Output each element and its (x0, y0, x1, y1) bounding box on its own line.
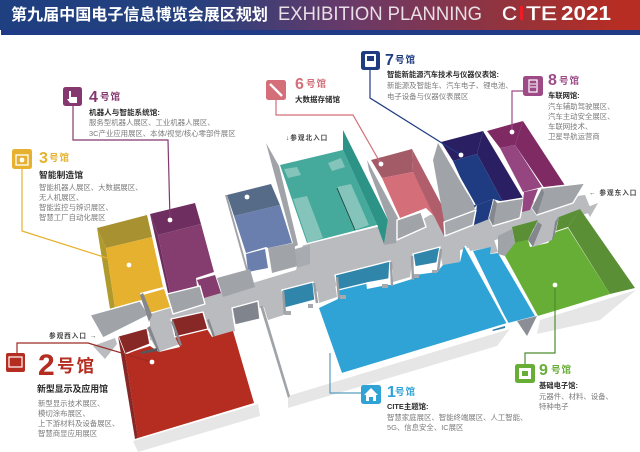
label: hall 8: 号馆 (559, 75, 580, 87)
description: 基础电子馆: (539, 381, 578, 390)
icon: box (12, 149, 32, 169)
description: 新型显示及应用馆 (37, 383, 108, 394)
CITE 2021 logo (502, 3, 611, 25)
label: hall 6 (266, 76, 383, 166)
label: hall 4: 号馆 (100, 91, 121, 103)
description (387, 402, 527, 432)
description: 汽车主动安全展区、 (548, 112, 615, 121)
leader line (512, 91, 523, 132)
number: 8 (548, 72, 557, 89)
description: 智能制造馆 (39, 169, 83, 180)
exhibition floor map (90, 121, 636, 452)
number: 7 (385, 52, 394, 69)
icon: chip (515, 364, 535, 383)
description (39, 169, 142, 222)
label: hall 1: 号馆 (395, 386, 416, 398)
CITE 2021 logo: TE (526, 4, 557, 25)
hall 3 room (90, 215, 170, 338)
CITE 2021 logo: 2021 (561, 3, 611, 25)
leader line (22, 169, 107, 258)
description (539, 381, 613, 411)
description: 新能源及智能车、汽车电子、锂电池、 (387, 81, 513, 90)
description: 汽车辅助驾驶展区、 (548, 102, 615, 111)
number: 3 (39, 150, 48, 167)
description: 智慧家庭展区、智能终端展区、人工智能、 (387, 413, 527, 422)
hall 6 teal room (266, 130, 388, 273)
icon: hand pointer (63, 87, 82, 106)
icon: screen (6, 353, 25, 372)
label: hall 4 (63, 87, 236, 222)
label: hall 9: 号馆 (551, 364, 572, 376)
description: 大数据存储馆 (295, 94, 340, 104)
number: 2 (38, 349, 55, 382)
label: hall 6: 号馆 (306, 78, 327, 90)
description: 5G、信息安全、IC展区 (387, 423, 464, 432)
english title: EXHIBITION PLANNING (278, 4, 482, 25)
description: 特种电子 (539, 402, 569, 411)
label: hall 1 (330, 353, 527, 432)
label: hall 2: 号馆 (57, 356, 96, 376)
description: CITE主题馆: (387, 402, 428, 411)
description: 机器人与智能系统馆: (89, 107, 160, 117)
description: 车联网技术、 (548, 122, 592, 131)
label: hall 2 (6, 343, 154, 438)
hall 2 room (118, 301, 290, 439)
description (37, 383, 119, 438)
leader line (17, 343, 152, 362)
hall 8 room (487, 121, 585, 215)
description: 智慧工厂自动化展区 (39, 213, 106, 222)
icon: device (361, 51, 380, 70)
description: 智能新能源汽车技术与仪器仪表馆: (387, 70, 499, 79)
number: 9 (539, 362, 548, 379)
description: 上下游材料及设备展区、 (38, 419, 119, 428)
number: 4 (89, 89, 98, 106)
corridor (93, 195, 598, 359)
hall 6 pink room (367, 149, 447, 245)
description: 模切涂布展区、 (38, 409, 90, 418)
hall 5 room (225, 184, 292, 272)
room pillars (283, 249, 441, 314)
CITE 2021 logo: C (502, 4, 517, 25)
map location dot: hall 5 (245, 195, 249, 199)
leader line (73, 106, 170, 220)
icon: document (523, 76, 543, 96)
room kiosks (285, 270, 437, 315)
hall 1 room (282, 246, 537, 374)
east entrance label: ← 参观东入口 (589, 188, 637, 197)
description: 元器件、材料、设备、 (539, 392, 613, 401)
description: 3C产业应用展区、本体/视觉/核心零部件展区 (89, 129, 236, 138)
description: 电子设备与仪器仪表展区 (387, 92, 469, 101)
leader line (525, 285, 555, 364)
description: 智慧商显应用展区 (38, 429, 98, 438)
description (387, 70, 513, 101)
number: 6 (295, 76, 304, 93)
description (89, 107, 236, 138)
hall 7 room (433, 131, 524, 236)
label: hall 8 (510, 72, 615, 141)
hall 4 room (150, 203, 255, 314)
description: 车联网馆: (548, 91, 580, 100)
label: hall 9 (515, 283, 613, 411)
leader line (276, 100, 381, 164)
title: 第九届中国电子信息博览会展区规划 (11, 5, 268, 24)
north entrance label: ↓参观北入口 (286, 133, 328, 142)
label: hall 7 (361, 51, 513, 157)
label: hall 7: 号馆 (395, 54, 416, 66)
label: hall 3: 号馆 (49, 152, 70, 164)
description: 智能机器人展区、大数据展区、 (39, 183, 142, 192)
icon: pen (266, 80, 286, 100)
hall 9 room (498, 209, 636, 317)
label: hall 3 (12, 149, 142, 267)
leader line (330, 353, 361, 393)
number: 1 (387, 384, 396, 401)
header banner (0, 0, 640, 35)
description (548, 91, 615, 141)
leader line (370, 70, 461, 155)
west entrance label: 参观西入口 → (49, 331, 97, 340)
description: 卫星导航运营商 (548, 132, 600, 141)
description: 服务型机器人展区、工业机器人展区、 (89, 118, 215, 127)
description: 新型显示技术展区、 (38, 399, 105, 408)
icon: house (361, 385, 381, 404)
description: 智能监控与辨识展区、 (39, 203, 113, 212)
ground shadows (133, 290, 636, 452)
description: 无人机展区、 (39, 193, 83, 202)
